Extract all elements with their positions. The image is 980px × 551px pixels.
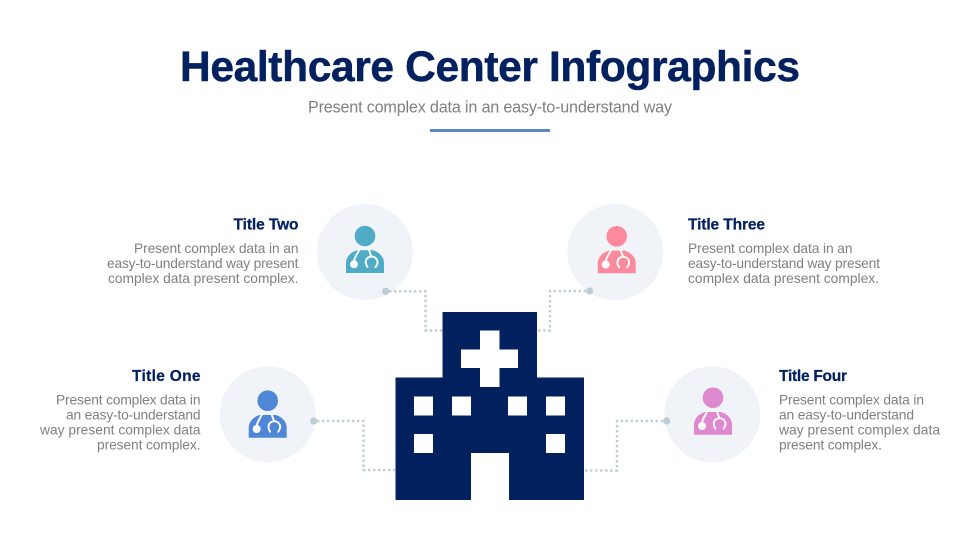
text: title two — [107, 216, 299, 286]
text: title three: Present complex data in an — [688, 241, 852, 256]
icon: blue doctor — [249, 390, 287, 438]
text: title one: way present complex data — [39, 422, 201, 438]
text: title three — [688, 216, 880, 286]
title: Healthcare Center Infographics — [180, 44, 800, 91]
subtitle: Present complex data in an easy-to-understand way — [308, 98, 673, 116]
text: title three: complex data present complex. — [688, 271, 879, 286]
connector: title four to building — [584, 417, 670, 470]
text: title two: Present complex data in an — [134, 241, 298, 256]
text: title three: easy-to-understand way present — [688, 256, 880, 271]
text: title four: way present complex data — [778, 422, 940, 438]
panel: title one circle — [220, 366, 316, 462]
text: title four: present complex. — [779, 438, 882, 452]
text: title four: Present complex data in — [779, 392, 924, 408]
text: title one: an easy-to-understand — [66, 408, 200, 422]
icon: hospital building — [396, 312, 584, 500]
icon: pink doctor — [598, 226, 636, 273]
text: title one: present complex. — [97, 438, 200, 452]
text: title two: Title Two — [234, 216, 298, 234]
panel: title three circle — [567, 204, 663, 300]
text: title two: easy-to-understand way present — [107, 256, 299, 271]
title underline — [430, 129, 550, 132]
text: title one: Title One — [132, 368, 201, 385]
connector: title three to building — [537, 287, 593, 330]
text: title one: Present complex data in — [56, 392, 200, 408]
icon: purple doctor — [694, 387, 732, 435]
text: title four — [778, 368, 940, 452]
text: title three: Title Three — [688, 216, 765, 234]
text: title four: an easy-to-understand — [779, 408, 914, 422]
icon: teal doctor — [346, 226, 384, 273]
panel: title two circle — [317, 204, 413, 300]
connector: title one to building — [310, 417, 395, 470]
text: title two: complex data present complex. — [108, 271, 298, 286]
text: title four: Title Four — [779, 368, 847, 385]
connector: title two to building — [382, 288, 442, 330]
panel: title four circle — [664, 366, 760, 462]
text: title one — [39, 368, 201, 452]
